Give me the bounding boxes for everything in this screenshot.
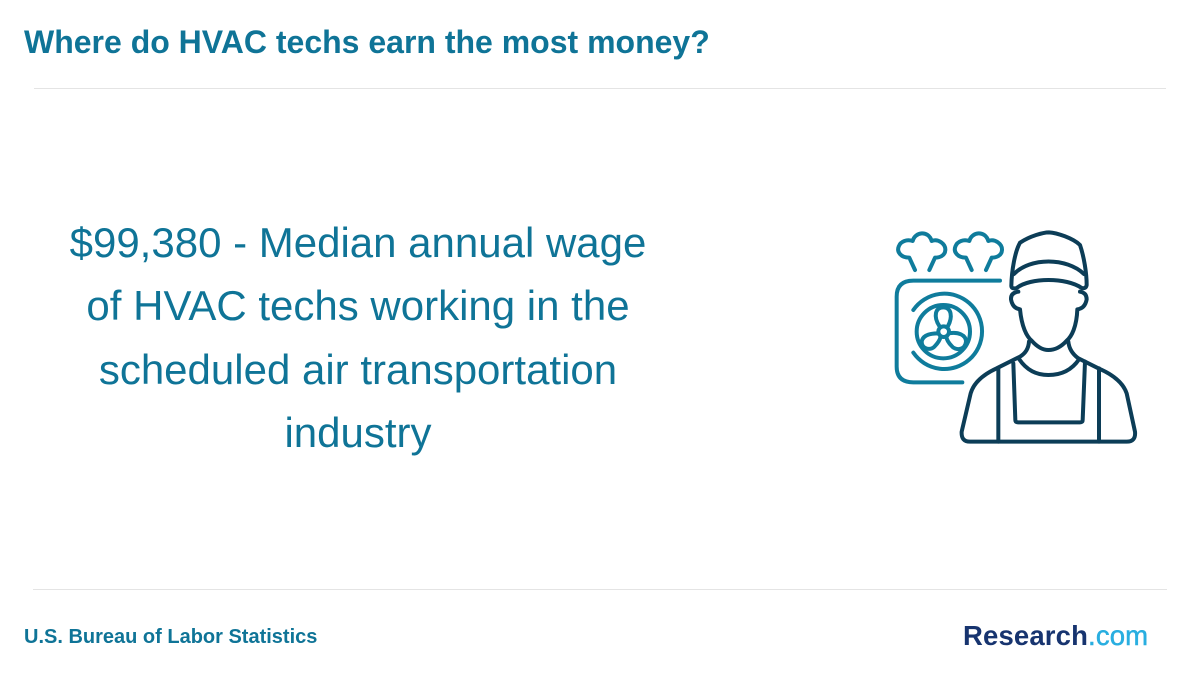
main statistic text: industry [284, 409, 432, 456]
icon: fan unit [897, 281, 1000, 382]
main statistic text: of HVAC techs working in the [86, 282, 630, 329]
logo: Research.com: Research.com [963, 620, 1148, 651]
main statistic text: $99,380 - Median annual wage [70, 219, 646, 266]
main statistic text [70, 219, 646, 456]
source note: U.S. Bureau of Labor Statistics [24, 626, 317, 648]
icon: steam clouds [898, 233, 1002, 270]
icon: technician [962, 232, 1135, 442]
icon: HVAC technician with fan unit [894, 230, 1138, 444]
title: Where do HVAC techs earn the most money? [24, 24, 710, 60]
main statistic text: scheduled air transportation [99, 346, 617, 393]
